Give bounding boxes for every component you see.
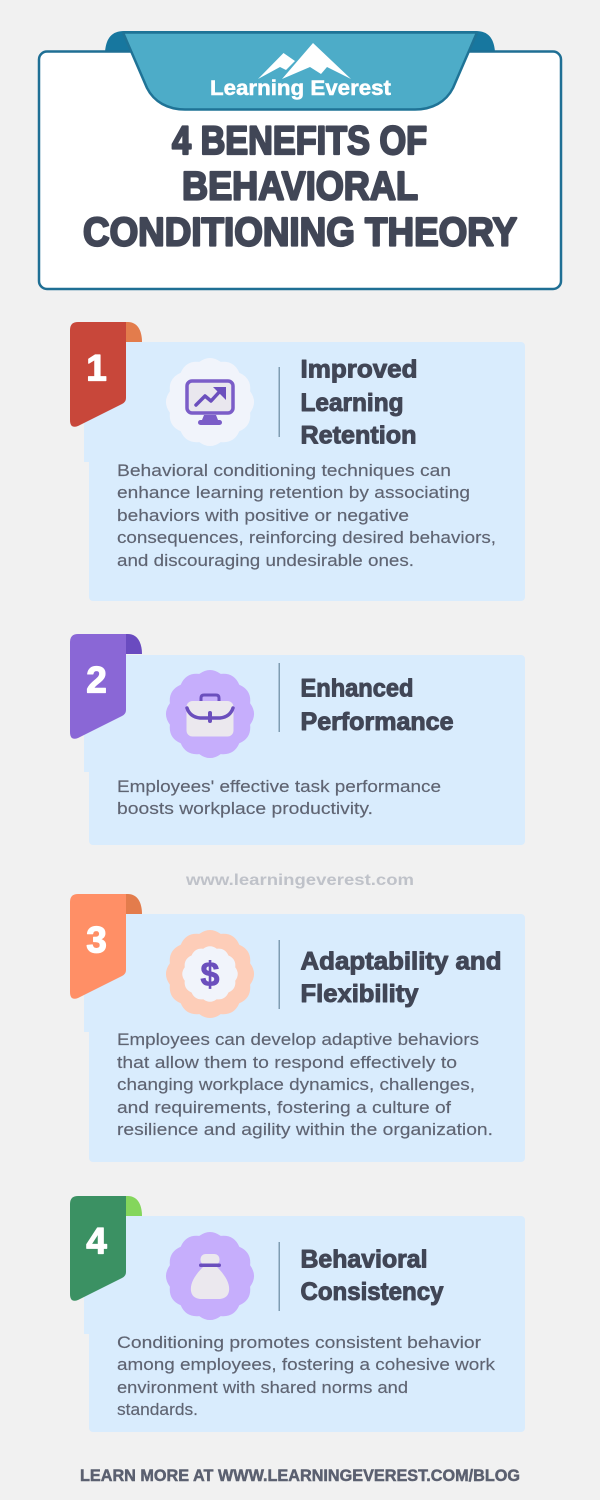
description: Conditioning promotes consistent behavior (117, 1333, 481, 1352)
ribbon number 4: 4 (86, 1220, 107, 1262)
title (83, 119, 517, 254)
panel: benefit 1 (70, 322, 525, 601)
icon: monitor with chart (166, 358, 254, 446)
heading (300, 948, 502, 1008)
divider (278, 940, 280, 1009)
card background (84, 655, 525, 845)
heading: Behavioral (300, 1246, 428, 1274)
panel: benefit 3 (70, 894, 525, 1162)
heading: Learning (300, 389, 404, 417)
ribbon number 1 (70, 322, 142, 427)
description: and discouraging undesirable ones. (117, 551, 414, 570)
description (117, 1030, 493, 1139)
heading (300, 356, 418, 450)
icon: briefcase (166, 670, 254, 758)
ribbon number 4 (70, 1196, 142, 1301)
description: behaviors with positive or negative (117, 506, 409, 525)
divider (278, 1242, 280, 1311)
description (117, 1333, 496, 1419)
logo wordmark: Learning Everest (210, 76, 391, 100)
description: and requirements, fostering a culture of (117, 1098, 451, 1117)
heading: Adaptability and (300, 948, 502, 976)
heading: Retention (300, 422, 416, 450)
icon: dollar (166, 930, 254, 1018)
description: standards. (117, 1400, 198, 1419)
icon: money bag (166, 1232, 254, 1320)
description: that allow them to respond effectively to (117, 1053, 457, 1072)
header tab back (105, 31, 495, 52)
description: Employees can develop adaptive behaviors (117, 1030, 479, 1049)
ribbon number 3 (70, 894, 142, 999)
description (117, 461, 496, 570)
heading: Performance (300, 708, 454, 736)
description: enhance learning retention by associating (117, 483, 470, 502)
website url: www.learningeverest.com (185, 872, 414, 889)
heading: Flexibility (300, 980, 419, 1008)
heading: Improved (300, 356, 418, 384)
description (117, 777, 441, 818)
title: 4 BENEFITS OF (172, 119, 427, 163)
description: Employees' effective task performance (117, 777, 441, 796)
divider (278, 367, 280, 437)
logo: Learning Everest (210, 43, 391, 100)
heading (300, 1246, 444, 1306)
description: among employees, fostering a cohesive work (117, 1355, 496, 1374)
description: resilience and agility within the organization. (117, 1120, 493, 1139)
heading (300, 674, 454, 736)
panel: benefit 4 (70, 1196, 525, 1432)
icon: mountains (258, 43, 351, 79)
card background (84, 1216, 525, 1432)
card background (84, 914, 525, 1162)
ribbon number 2 (70, 634, 142, 739)
description: changing workplace dynamics, challenges, (117, 1075, 475, 1094)
panel: benefit 2 (70, 634, 525, 845)
card background (84, 342, 525, 601)
footer call to action: LEARN MORE AT WWW.LEARNINGEVEREST.COM/BLOG (80, 1467, 520, 1485)
header card (39, 52, 561, 289)
ribbon number 3: 3 (86, 920, 107, 960)
icon: dollar: $ (201, 956, 220, 994)
divider (278, 663, 280, 732)
header ribbon (123, 32, 477, 110)
description: Behavioral conditioning techniques can (117, 461, 451, 480)
description: environment with shared norms and (117, 1378, 408, 1397)
header panel (39, 31, 561, 289)
ribbon number 1: 1 (86, 348, 107, 388)
title: BEHAVIORAL (182, 164, 418, 208)
description: consequences, reinforcing desired behaviors, (117, 528, 496, 547)
heading: Enhanced (300, 674, 414, 702)
description: boosts workplace productivity. (117, 799, 373, 818)
title: CONDITIONING THEORY (83, 210, 517, 254)
ribbon number 2: 2 (86, 660, 107, 700)
heading: Consistency (300, 1278, 444, 1306)
